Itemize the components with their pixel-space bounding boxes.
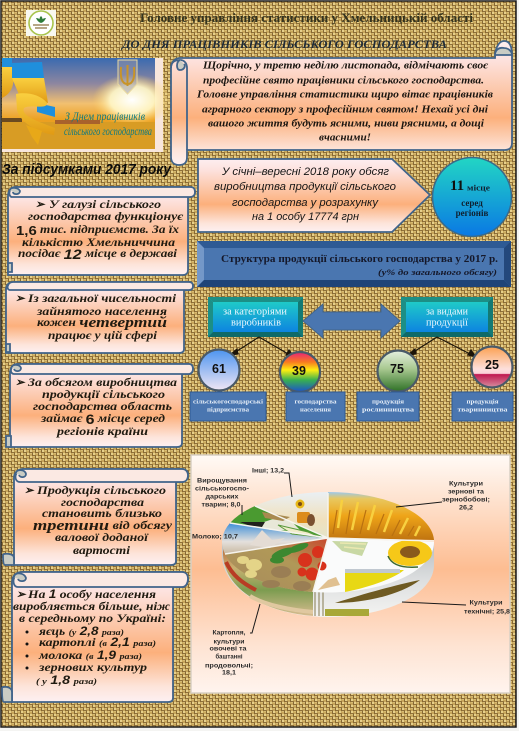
label box: crop products: рослинництва <box>362 406 415 414</box>
label: vegetables: Картопля, <box>212 630 246 636</box>
scroll 5 text: в середньому по Україні: <box>19 613 166 625</box>
callout text: виробництва продукції сільського <box>214 181 396 193</box>
scroll 5 text: ( у 1,8 раза) <box>36 675 97 687</box>
circle: 75: 75 <box>390 362 404 376</box>
scroll 4 text: третини від обсягу <box>33 518 173 534</box>
pie slice: technical crops <box>313 538 434 593</box>
photo caption: сільського господарства <box>64 126 152 138</box>
panel: scroll 4 <box>3 469 188 565</box>
label box: animal products: тваринництва <box>458 406 508 414</box>
greeting text: Щорічно, у третю неділю листопада, відмічають своє <box>202 60 489 72</box>
label: vegetables <box>205 630 253 676</box>
label: livestock: дарських <box>206 494 239 500</box>
scroll 3 text <box>15 377 177 438</box>
double arrow <box>303 304 400 338</box>
scroll 4 text: Продукція сільського <box>36 485 166 497</box>
pie slice: milk <box>222 523 328 554</box>
box: by product types: продукції <box>426 318 468 328</box>
structure heading bar: (у% до загального обсягу) <box>378 267 497 277</box>
scroll 2 text: ➢ <box>15 293 26 305</box>
label: grain: Культури <box>449 480 483 488</box>
circle: 39: 39 <box>292 364 306 378</box>
circle: 39 <box>280 352 320 392</box>
circle: 25 <box>472 346 512 388</box>
scroll 1 text: 1,6 тис. підприємств. За їх <box>16 222 179 238</box>
label: vegetables: продовольчі; <box>205 662 253 670</box>
label box: agricultural enterprises: підприємства <box>207 406 250 414</box>
panel: scroll 2 <box>6 282 193 353</box>
callout text <box>214 166 396 223</box>
scroll 1 text: У галузі сільського <box>49 199 161 211</box>
scroll 2 text: кожен четвертий <box>37 315 167 331</box>
callout text: господарства у розрахунку <box>232 197 380 209</box>
subtitle: ДО ДНЯ ПРАЦІВНИКІВ СІЛЬСЬКОГО ГОСПОДАРСТВА <box>121 37 447 51</box>
scroll 4 text: становить близько <box>42 508 162 520</box>
badge: 11th place: 11 <box>450 178 464 194</box>
box: by product types: за видами <box>426 306 469 318</box>
scroll 5 text: картоплі (в 2,1 раза) <box>39 637 156 649</box>
label: vegetables: 18,1 <box>222 670 236 676</box>
scroll 2 text: Із загальної чисельності <box>27 293 177 305</box>
scroll 1 text <box>16 199 183 262</box>
label: technical crops: Культури <box>470 600 502 606</box>
label: vegetables: культури <box>214 638 244 646</box>
scroll 5 text: молока (в 1,9 раза) <box>38 650 142 662</box>
box: by product types <box>401 297 493 337</box>
label box: crop products: продукція <box>372 398 405 406</box>
photo caption <box>64 111 152 138</box>
greeting text <box>196 60 493 144</box>
scroll 5 text <box>13 589 170 687</box>
box: by producer categories: виробників <box>231 318 281 328</box>
scroll 1 text: посідає 12 місце в державі <box>18 246 178 262</box>
pie side <box>222 542 434 617</box>
label: other: Інші; 13,2 <box>252 466 284 474</box>
panel: greeting scroll <box>171 41 512 165</box>
scroll 3 text: регіонів країни <box>56 426 149 438</box>
badge: 11th place <box>432 158 512 236</box>
panel: pie chart <box>191 455 510 693</box>
circle: 75 <box>378 350 418 392</box>
greeting text: аграрного сектору з професійним святом! Нехай усі дні <box>202 104 488 116</box>
label: grain: зернобобові; <box>442 496 490 504</box>
scroll 4 text: валової доданої <box>55 532 149 544</box>
greeting text: вчасними! <box>319 132 371 144</box>
label: livestock <box>195 478 249 508</box>
label box: households: господарства <box>294 398 337 406</box>
scroll 3 text: продукції сільського <box>42 389 165 401</box>
scroll 1 text: кількістю Хмельниччина <box>22 237 175 249</box>
panel: scroll 3 <box>6 364 193 447</box>
arrows to circles <box>230 337 476 357</box>
circle: 25: 25 <box>485 358 499 372</box>
leader lines <box>242 473 466 633</box>
title: Головне управління статистики у Хмельницькій області <box>140 11 474 25</box>
greeting photo <box>2 58 172 152</box>
label box: animal products <box>452 392 513 421</box>
scroll 5 text: виробляється більше, ніж <box>13 601 170 613</box>
pie slice: livestock <box>230 506 328 538</box>
sunflower <box>388 540 432 567</box>
scroll 2 text: зайнятого населення <box>36 305 167 318</box>
panel: scroll 5 <box>2 572 188 702</box>
greeting text: Головне управління статистики щиро вітає працівників <box>196 90 493 100</box>
section heading: За підсумками 2017 року <box>2 162 172 178</box>
label: grain: 26,2 <box>459 504 473 512</box>
label: livestock: сільськогоспо- <box>195 484 249 492</box>
label box: agricultural enterprises <box>190 392 266 421</box>
scroll 5 text: зернових культур <box>38 662 147 674</box>
structure heading bar: Структура продукції сільського господарства у 2017 р. <box>221 253 498 265</box>
label: grain: зернові та <box>448 488 484 496</box>
icon: trident <box>118 60 137 94</box>
callout: arrow pentagon <box>198 159 430 232</box>
scroll 3 text: За обсягом виробництва <box>27 377 177 389</box>
callout text: У січні–вересні 2018 року обсяг <box>221 166 390 178</box>
badge: 11th place: регіонів <box>456 208 488 218</box>
callout text: на 1 особу 17774 грн <box>252 211 359 223</box>
icon: ribbon <box>2 58 55 145</box>
label box: agricultural enterprises: сільськогосподарські <box>193 398 263 406</box>
scroll 5 text: яєць (у 2,8 раза) <box>38 626 124 638</box>
pie slice separators <box>225 493 434 592</box>
circle: 61 <box>198 350 240 390</box>
scroll 4 text: ➢ <box>24 485 35 497</box>
pie slice: other <box>255 492 328 538</box>
structure heading bar <box>197 241 511 287</box>
scroll 5 text: ➢ <box>16 589 27 601</box>
label: vegetables: баштанні <box>216 652 243 660</box>
scroll 3 text: господарства область <box>33 401 172 413</box>
pie slice: vegetables <box>225 538 328 592</box>
scroll 1 text: ➢ <box>35 199 46 211</box>
scroll 2 text: працює у цій сфері <box>48 329 158 342</box>
circle: 61: 61 <box>212 362 226 376</box>
label box: animal products: продукція <box>466 398 499 406</box>
scroll 2 text <box>15 293 177 342</box>
badge: 11th place: місце <box>467 184 491 192</box>
label box: crop products <box>357 392 419 421</box>
label: technical crops <box>464 600 510 616</box>
box: by producer categories <box>208 297 303 337</box>
label: livestock: Вирощування <box>197 478 247 484</box>
scroll 4 text: вартості <box>73 545 131 557</box>
scroll 4 text <box>24 485 173 557</box>
label: milk: Молоко; 10,7 <box>192 534 238 540</box>
scroll 4 text: господарства <box>61 497 144 509</box>
logo <box>26 10 56 36</box>
badge: 11th place: серед <box>461 198 483 208</box>
label: technical crops: технічні; 25,8 <box>464 608 510 616</box>
scroll 3 text: займає 6 місце серед <box>40 412 165 426</box>
label: livestock: тварин; 8,0 <box>202 502 241 508</box>
label: vegetables: овочеві та <box>210 644 247 652</box>
scroll 3 text: ➢ <box>15 377 26 389</box>
panel: scroll 1 <box>8 187 195 275</box>
label: grain <box>442 480 490 512</box>
greeting text: вашого життя будуть ясними, ниви рясними, а дощі <box>208 118 484 130</box>
box: by producer categories: за категоріями <box>223 306 288 318</box>
label box: households: населення <box>300 406 332 414</box>
label box: households <box>286 392 345 421</box>
greeting text: професійне свято працівники сільського господарства. <box>203 76 484 86</box>
photo caption: З Днем працівників <box>65 111 145 123</box>
scroll 5 text: На 1 особу населення <box>27 589 156 601</box>
pie slice: grain <box>328 492 434 540</box>
scroll 1 text: господарства функціонує <box>28 211 183 223</box>
